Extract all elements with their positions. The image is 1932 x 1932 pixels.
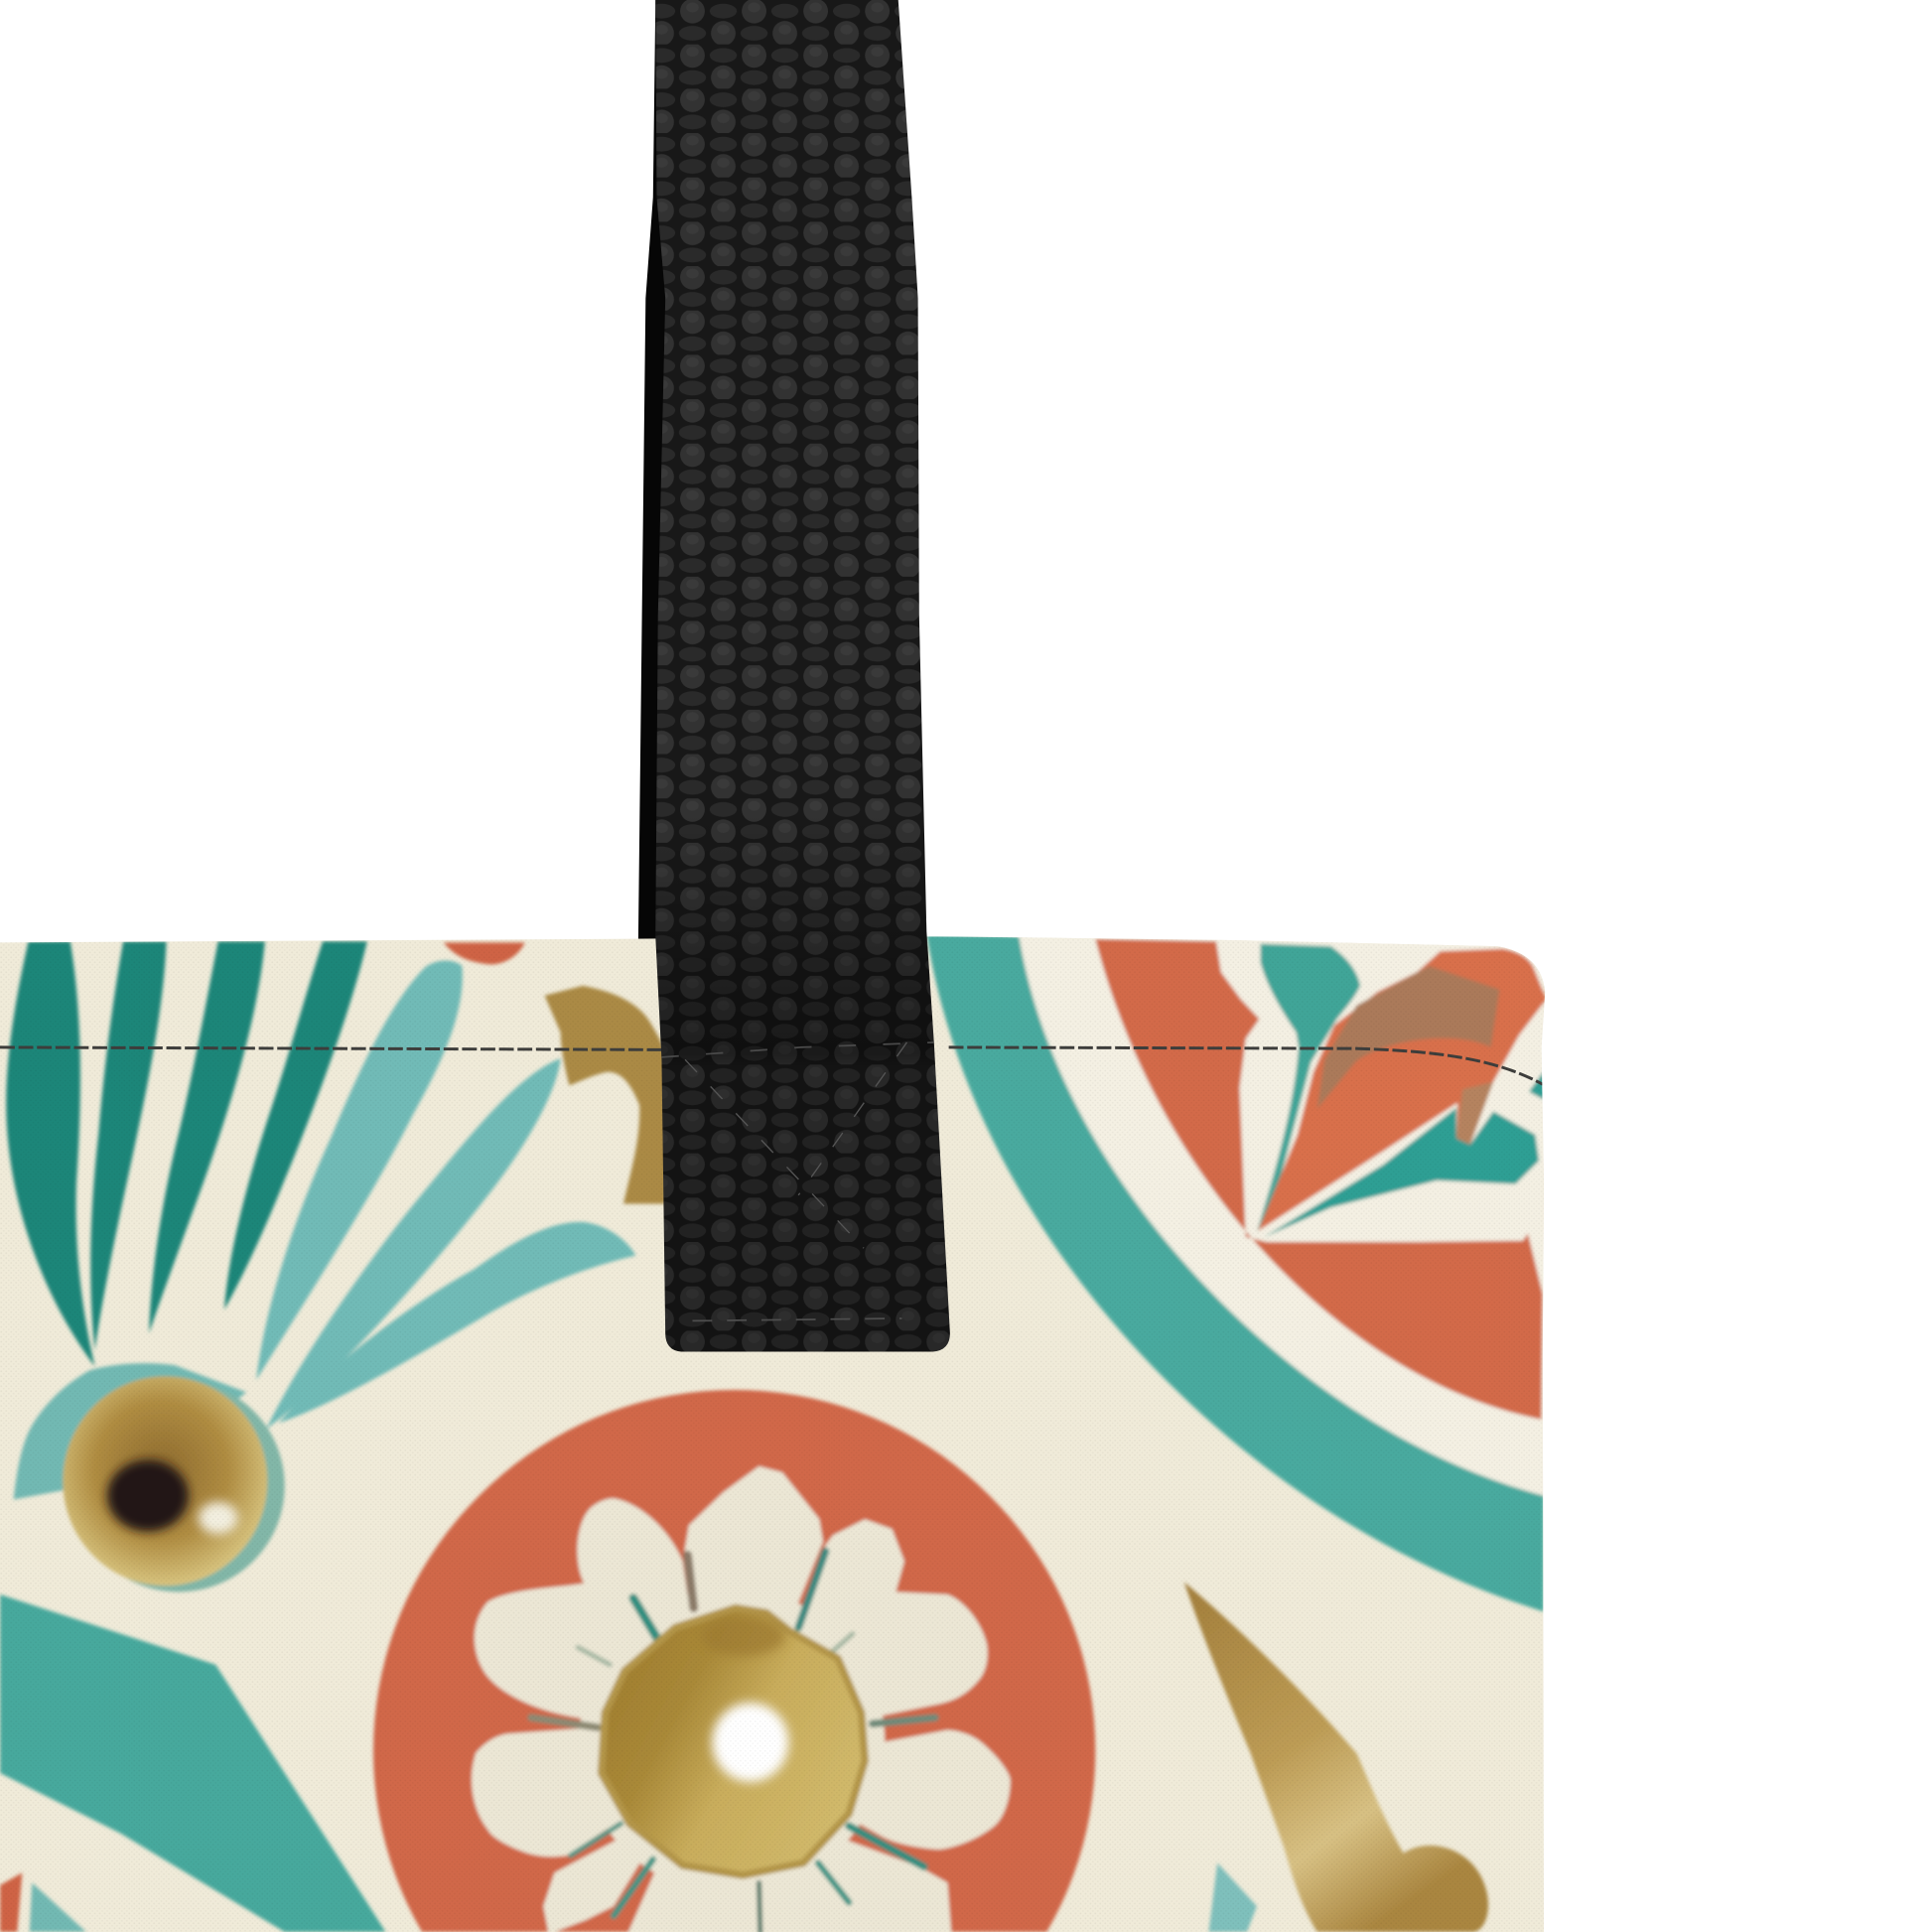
strap darkening near bag [655,0,950,1351]
bottom left fragments [0,1872,22,1932]
big teal stem shape [0,1594,385,1932]
gold flower centre [602,1608,865,1875]
seam stitching [0,1047,1543,1084]
flower sepals [531,1552,935,1932]
eye flower [63,1376,285,1591]
orange medallion wedge [1095,939,1543,1420]
gold ornament by strap [545,986,672,1204]
orange feather leaf [1258,949,1547,1231]
tote bag illustration [0,0,1545,1932]
small teal bit at seam [1529,1069,1545,1100]
bag panel [0,911,1578,1932]
orange flower medallion [373,1390,1095,1932]
strap bottom hem [692,1318,901,1320]
printed pattern [0,934,1547,1932]
brown overlay on feather [1317,966,1499,1109]
strap cross stitching [685,1042,906,1248]
bright cream inside arc [1019,936,1544,1496]
black woven strap [655,0,950,1351]
orange top fragment [444,942,525,964]
light teal fan leaves [256,961,635,1430]
strap shadow behind bag edge [638,0,690,941]
teal bit by gold leaf [1208,1863,1257,1932]
brown tail of feather [1456,1082,1493,1145]
strap fold line [661,1042,934,1057]
canvas base [0,911,1578,1932]
cream petals [472,1466,1011,1932]
gold leaf [1184,1583,1488,1932]
thin teal leaf [1257,944,1360,1232]
large teal arc [926,934,1544,1611]
teal cap of eye flower [14,1363,246,1499]
dark green fan leaves [6,941,367,1366]
eye flower dark pupil [107,1460,189,1532]
canvas texture [0,911,1578,1932]
lower teal leaf [1264,1108,1539,1237]
